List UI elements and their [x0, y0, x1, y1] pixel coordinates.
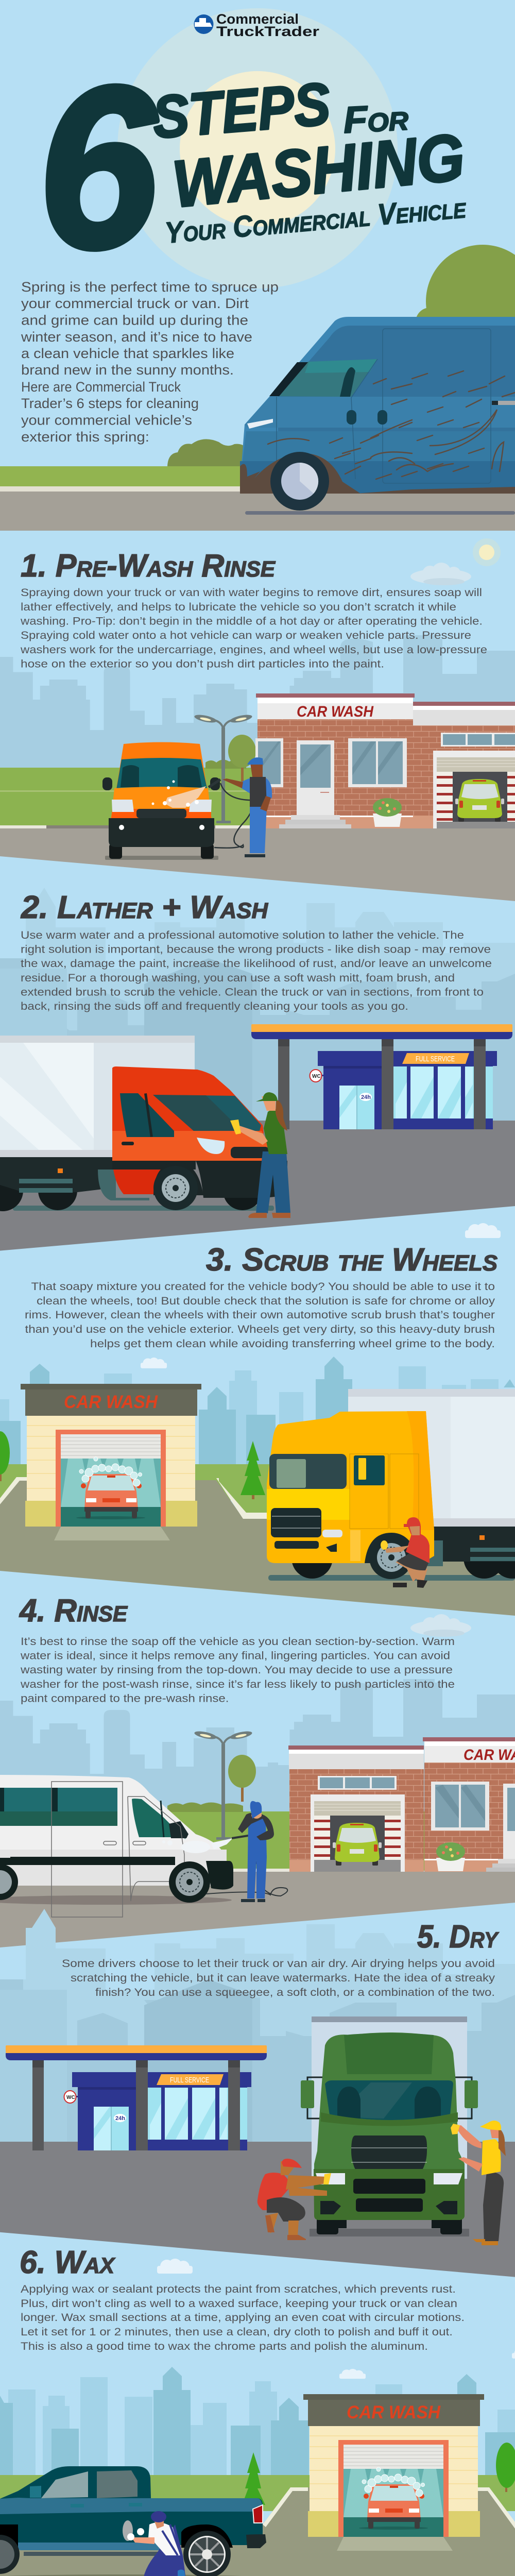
hose	[206, 1847, 287, 1896]
panel: step 2 lather and wash	[0, 888, 515, 1251]
road	[0, 492, 515, 531]
title word: for: For	[342, 96, 409, 141]
panel: step 3 scrub the wheels	[0, 1242, 515, 1616]
car wash building	[255, 693, 515, 828]
mirrors	[102, 777, 220, 790]
gas station	[251, 1024, 512, 1129]
icon: truck badge	[194, 14, 213, 34]
kneeling worker	[123, 2511, 187, 2576]
grille	[231, 1147, 269, 1158]
shorts	[267, 2197, 305, 2222]
body text: extended brush to scrub the vehicle. Clean the truck or van in sections, from front to	[21, 986, 484, 998]
headlights	[112, 800, 212, 812]
gloves	[127, 2528, 144, 2540]
cloud	[465, 1223, 501, 1238]
cap	[256, 1092, 278, 1101]
cab	[267, 1411, 434, 1563]
logo: Commercial Truck Trader	[194, 11, 320, 39]
muddy blue van	[240, 317, 515, 511]
body text: It’s best to rinse the soap off the vehicle as you clean section-by-section. Warm	[21, 1636, 455, 1648]
ponytail	[276, 1099, 287, 1131]
sun halo	[117, 8, 398, 289]
cloud	[410, 1614, 471, 1637]
annex window strip	[318, 1776, 397, 1790]
front wheel	[153, 1166, 198, 1210]
front bumper	[196, 1161, 287, 1198]
car wash building	[21, 1384, 201, 1540]
rear wheel	[0, 1864, 18, 1900]
sign text: CAR WASH	[347, 2402, 441, 2422]
garage	[311, 1794, 405, 1872]
road	[0, 2142, 515, 2277]
grille	[351, 2136, 427, 2174]
lower grilles	[353, 2179, 425, 2212]
legs	[396, 1556, 418, 1582]
skyline	[0, 2367, 515, 2477]
cloud	[157, 2259, 193, 2274]
windshield	[269, 1454, 347, 1489]
rear wheels	[0, 1170, 77, 1211]
wc sign text: WC	[312, 1074, 321, 1079]
cargo box	[348, 1389, 515, 1527]
cab	[314, 2032, 465, 2220]
curb	[0, 486, 247, 492]
wc sign text: WC	[66, 2095, 75, 2100]
heading: 2. Lather + Wash	[21, 890, 268, 925]
arm	[131, 2537, 154, 2544]
wand	[232, 1835, 251, 1838]
sponge	[323, 2173, 331, 2184]
intro paragraph: a clean vehicle that sparkles like	[21, 346, 234, 361]
jeans	[256, 1151, 290, 1213]
woman washing windshield	[230, 1092, 290, 1218]
cloud	[410, 563, 471, 585]
panel: step 1 pre-wash rinse	[0, 538, 515, 901]
mud splatter	[268, 371, 515, 479]
arm	[385, 1546, 409, 1553]
grille	[136, 809, 186, 818]
intro paragraph: and grime can build up during the	[21, 312, 248, 328]
annex roof	[413, 702, 515, 706]
car wash building	[288, 1737, 515, 1872]
worker rinsing van	[206, 1801, 287, 1902]
body text: Applying wax or sealant protects the paint from scratches, which prevents rust.	[21, 2283, 456, 2295]
steps	[486, 1859, 515, 1872]
body text: washer for the post-wash rinse, since it’s far less likely to push particles into the	[20, 1679, 455, 1690]
left tree	[0, 1431, 10, 1481]
body text: than you’d use on the vehicle exterior. Wheels get very dirty, so this heavy-duty brush	[25, 1324, 495, 1335]
body text: washers work for the undercarriage, engines, and wheel wells, but use a low-pressure	[20, 644, 487, 656]
cargo box	[312, 2016, 467, 2179]
body text: This is also a good time to wax the chrome parts and polish the aluminum.	[21, 2341, 428, 2352]
body text: back, rinsing the suds off and frequently cleaning your tools as you go.	[21, 1001, 408, 1012]
title	[33, 37, 468, 298]
white passenger van	[0, 1775, 233, 1917]
grass strip	[0, 466, 247, 486]
roof panel	[344, 2033, 434, 2074]
door	[297, 740, 334, 815]
annex roof	[288, 1745, 424, 1750]
tree	[228, 735, 256, 782]
annex window strip	[441, 733, 515, 747]
side window	[0, 1788, 117, 1826]
road	[0, 1121, 515, 1251]
title word: washing: WASHING	[169, 120, 468, 222]
intro paragraph: Here are Commercial Truck	[21, 379, 181, 395]
door	[503, 1784, 515, 1859]
worker with pressure washer	[209, 757, 272, 857]
mirror arms	[307, 2077, 472, 2119]
sign text: CAR WASH	[64, 1392, 158, 1412]
intro paragraph: exterior this spring:	[21, 429, 149, 445]
cloud	[141, 1358, 167, 1368]
foam	[151, 780, 206, 808]
lower cab	[314, 2169, 465, 2220]
body text: paint compared to the pre-wash rinse.	[21, 1693, 229, 1704]
door lines	[350, 1454, 419, 1529]
curb	[227, 1869, 294, 1872]
cap	[480, 2121, 501, 2130]
gas station	[6, 2045, 267, 2150]
worker figure	[222, 757, 272, 857]
orange van	[102, 742, 220, 860]
hedge	[167, 439, 247, 466]
station building	[6, 2045, 267, 2150]
panel: step 5 dry	[0, 1909, 515, 2277]
van front wheel	[270, 452, 329, 511]
van window	[269, 359, 377, 397]
body text: hose on the exterior so you don’t push dirt particles into the paint.	[21, 658, 384, 670]
chassis	[0, 1157, 116, 1192]
body text: residue. For a thorough washing, you can use a soft wash mitt, foam brush, and	[21, 972, 455, 984]
ponytail	[499, 2128, 506, 2156]
front wheel arch	[181, 2524, 233, 2550]
front wheel	[183, 2531, 231, 2576]
hedge	[205, 759, 246, 769]
van handles	[347, 410, 387, 425]
box truck	[0, 1036, 287, 1211]
cap	[151, 2511, 166, 2522]
heading: 4. Rinse	[19, 1593, 128, 1629]
wheel arch	[153, 1162, 203, 1195]
woman polishing truck	[451, 2121, 506, 2245]
foam	[162, 1838, 233, 1853]
head	[281, 2161, 295, 2175]
hose	[214, 783, 255, 848]
headlight	[322, 1530, 342, 1537]
head	[152, 2514, 164, 2529]
road	[0, 1872, 515, 1947]
front bumper	[206, 1861, 233, 1890]
lower blue band	[0, 2543, 165, 2550]
body text: washing. Pro-Tip: don’t begin in the middle of a hot day or after operating the vehicle.	[20, 615, 483, 628]
cab window	[132, 1799, 185, 1839]
car wash building	[303, 2394, 484, 2551]
white shirt	[148, 2522, 181, 2555]
panel: step 4 rinse	[0, 1593, 515, 1947]
garage	[433, 751, 515, 828]
right window	[348, 738, 407, 787]
building and car	[21, 1384, 201, 1540]
hero section	[0, 8, 515, 531]
green car	[333, 1823, 382, 1866]
body text: Spraying down your truck or van with water begins to remove dirt, ensures soap will	[21, 587, 482, 599]
main roof	[423, 1737, 515, 1741]
grass	[0, 1811, 515, 1871]
cab upper	[112, 1066, 264, 1133]
green tree	[416, 245, 515, 358]
legs	[267, 2213, 278, 2233]
body text: Use warm water and a professional automotive solution to lather the vehicle. The	[21, 929, 464, 941]
tree	[228, 1755, 256, 1802]
tail light	[253, 2505, 263, 2523]
shirt	[264, 1109, 287, 1154]
intro paragraph: Trader’s 6 steps for cleaning	[21, 396, 199, 411]
boots	[162, 2570, 187, 2576]
numeral 6: 6	[33, 37, 163, 298]
grass	[0, 1464, 515, 1500]
body text: Spraying cold water onto a hot vehicle can warp or weaken vehicle parts. Pressure	[21, 630, 471, 641]
van shadow	[105, 856, 218, 860]
body text: That soapy mixture you created for the vehicle body? You should be able to use it to	[31, 1281, 495, 1293]
truck shadow	[13, 1206, 274, 1211]
grille	[271, 1508, 321, 1537]
windshield	[153, 1095, 261, 1131]
headlights	[316, 2173, 462, 2184]
annex brick wall	[413, 725, 515, 828]
intro paragraph: brand new in the sunny months.	[21, 362, 234, 378]
van body	[240, 317, 515, 494]
clouds	[339, 2348, 515, 2379]
skyline	[0, 888, 515, 1123]
heading: 5. Dry	[417, 1919, 499, 1955]
grass	[0, 768, 515, 827]
body	[111, 742, 212, 819]
roof	[256, 693, 415, 698]
fog lamps	[320, 2201, 457, 2214]
cab mid band	[112, 1131, 270, 1161]
heading: 6. Wax	[20, 2245, 115, 2280]
title word: steps: STEPS	[150, 70, 333, 151]
logo wordmark: TruckTrader	[216, 24, 320, 39]
chassis	[430, 1527, 515, 1562]
cab black stripe	[112, 1161, 196, 1170]
cap	[282, 2159, 302, 2168]
sign panel	[258, 703, 413, 719]
figure	[238, 1801, 274, 1902]
front wheel	[169, 1861, 210, 1903]
annex brick wall	[289, 1769, 424, 1872]
skyline	[0, 635, 515, 768]
right tree	[496, 2443, 515, 2492]
road	[0, 828, 515, 901]
handles	[104, 1841, 146, 1845]
yellow rag	[230, 1120, 241, 1134]
door handles	[71, 2503, 142, 2507]
title subtitle: Your Commercial Vehicle	[164, 191, 468, 250]
skyline	[0, 1357, 515, 1466]
shorts	[397, 1552, 428, 1570]
sun disc	[180, 71, 335, 227]
green truck front view	[301, 2016, 478, 2236]
van headlight	[247, 419, 273, 429]
sill	[24, 2552, 163, 2556]
main brick wall	[424, 1762, 515, 1872]
shoes	[393, 1580, 427, 1588]
24h sign text: 24h	[361, 1094, 371, 1100]
base	[258, 816, 413, 828]
door outlines	[52, 1782, 184, 1917]
rear wheel	[0, 2524, 20, 2574]
intro paragraph: your commercial vehicle’s	[21, 412, 192, 428]
side window	[354, 1455, 385, 1485]
cargo box	[0, 1036, 94, 1152]
windshield	[116, 758, 207, 789]
cab lower	[113, 1170, 165, 1194]
van body	[0, 1775, 227, 1886]
red shirt	[406, 1533, 430, 1563]
steps	[279, 815, 351, 828]
yellow rag	[451, 2124, 460, 2134]
road shadow	[245, 511, 515, 515]
lower bumper	[109, 818, 214, 847]
green car	[455, 779, 504, 822]
flower pot	[373, 798, 402, 827]
body text: wasting water by rinsing from the top-down. You may decide to use a pressure	[20, 1664, 453, 1676]
road	[0, 2487, 515, 2576]
front wheel	[369, 1536, 413, 1579]
boots	[248, 1213, 290, 1218]
side highlight	[0, 2498, 263, 2514]
headlight	[197, 1138, 225, 1154]
side window	[120, 1093, 174, 1137]
station building	[251, 1024, 512, 1129]
mirror	[358, 1458, 366, 1480]
hedge	[167, 1802, 243, 1812]
pickup truck	[0, 2466, 267, 2576]
street lamp	[194, 714, 253, 823]
skyline	[0, 1679, 515, 1811]
shoes	[265, 2215, 306, 2240]
panel: step 6 wax	[0, 2245, 515, 2576]
windshield	[325, 2080, 453, 2120]
intro paragraph: your commercial truck or van. Dirt	[21, 296, 249, 311]
wand	[209, 779, 220, 787]
sign panel	[424, 1746, 515, 1762]
body text: finish? You can use a squeegee, a soft cloth, or a combination of the two.	[95, 1987, 495, 1998]
skyline	[0, 1909, 515, 2144]
street lamp	[194, 1730, 253, 1840]
full service sign text: FULL SERVICE	[416, 1055, 455, 1063]
side steps	[19, 1179, 73, 1193]
windows	[30, 2470, 138, 2498]
head	[489, 2125, 499, 2138]
buffer	[123, 2520, 133, 2541]
wheels	[317, 2213, 462, 2234]
pants	[483, 2172, 504, 2241]
man scrubbing wheel	[381, 1517, 430, 1588]
wheels	[291, 1537, 515, 1579]
curb	[0, 825, 263, 828]
body text: the wax, damage the paint, increase the likelihood of rust, and/or leave an unwelcome	[21, 958, 492, 970]
heading: 1. Pre-Wash Rinse	[21, 548, 276, 584]
body text: Plus, dirt won’t cling as well to a waxed surface, keeping your truck or van clean	[21, 2298, 457, 2310]
left window	[255, 738, 283, 787]
wheels	[109, 844, 214, 859]
arm	[234, 1125, 268, 1145]
van stripes	[245, 397, 515, 428]
body text: longer. Wax small sections at a time, applying an even coat with circular motions.	[21, 2312, 465, 2324]
cab shade	[321, 2112, 458, 2126]
hood	[111, 787, 211, 819]
sign text: CAR WASH	[297, 703, 374, 720]
intro paragraph: winter season, and it’s nice to have	[21, 329, 252, 345]
head and cap	[407, 1517, 421, 1534]
yellow semi truck	[267, 1389, 515, 1581]
24h sign text: 24h	[115, 2115, 125, 2122]
overalls legs	[143, 2524, 187, 2576]
front wheel arch	[350, 1530, 360, 1561]
far front wheel	[223, 1171, 262, 1210]
full service sign text: FULL SERVICE	[170, 2076, 209, 2084]
mirrors	[301, 2080, 478, 2108]
van door outlines	[277, 329, 491, 483]
red shirt	[258, 2173, 293, 2210]
body text: lather effectively, and helps to lubricate the vehicle so you don’t scratch it while	[21, 601, 456, 613]
logo wordmark: Commercial	[216, 11, 299, 27]
body text: helps get them clean while avoiding transferring wheel grime to the body.	[90, 1338, 495, 1350]
truck shadow	[268, 1575, 515, 1581]
flower pot	[436, 1842, 465, 1871]
pine tree	[242, 2452, 265, 2505]
window	[431, 1782, 489, 1831]
head	[262, 1096, 276, 1111]
pine tree	[241, 1441, 265, 1499]
body text: rims. However, clean the wheels with their own automotive scrub brush that’s tougher	[25, 1309, 495, 1321]
shadow	[310, 2229, 469, 2236]
brick wall	[258, 719, 413, 816]
arms	[456, 2125, 482, 2148]
body text: Let it set for 1 or 2 minutes, then use a clean, dry cloth to polish and buff it out.	[21, 2326, 453, 2338]
black stripe	[10, 1857, 175, 1865]
boots	[473, 2239, 498, 2245]
shadow	[0, 2574, 267, 2576]
yellow sponge	[381, 1540, 388, 1550]
building and car	[303, 2394, 484, 2551]
sun	[473, 538, 501, 566]
heading: 3. Scrub the Wheels	[206, 1242, 497, 1278]
yellow shirt	[482, 2139, 501, 2175]
van side panel	[278, 326, 515, 494]
suspenders	[162, 2524, 181, 2555]
body text: right solution is important, because the wrong products - like dish soap - may remove	[21, 944, 491, 955]
grass	[0, 2475, 515, 2511]
body text: Some drivers choose to let their truck or van air dry. Air drying helps you avoid	[62, 1958, 495, 1970]
van shadow	[0, 1895, 232, 1905]
arms	[286, 2175, 327, 2190]
crouching man	[258, 2159, 331, 2240]
body text: water is ideal, since it helps remove any final, lingering particles. You can avoid	[20, 1650, 450, 1662]
body	[0, 2466, 263, 2545]
body text: scratching the vehicle, but it can leave watermarks. Hate the idea of a streaky	[71, 1972, 495, 1984]
intro paragraph: Spring is the perfect time to spruce up	[21, 279, 279, 295]
body text: clean the wheels, too! But double check that the solution is safe for chrome or alloy	[37, 1295, 495, 1307]
road	[0, 1480, 515, 1616]
bumper	[246, 2534, 266, 2548]
